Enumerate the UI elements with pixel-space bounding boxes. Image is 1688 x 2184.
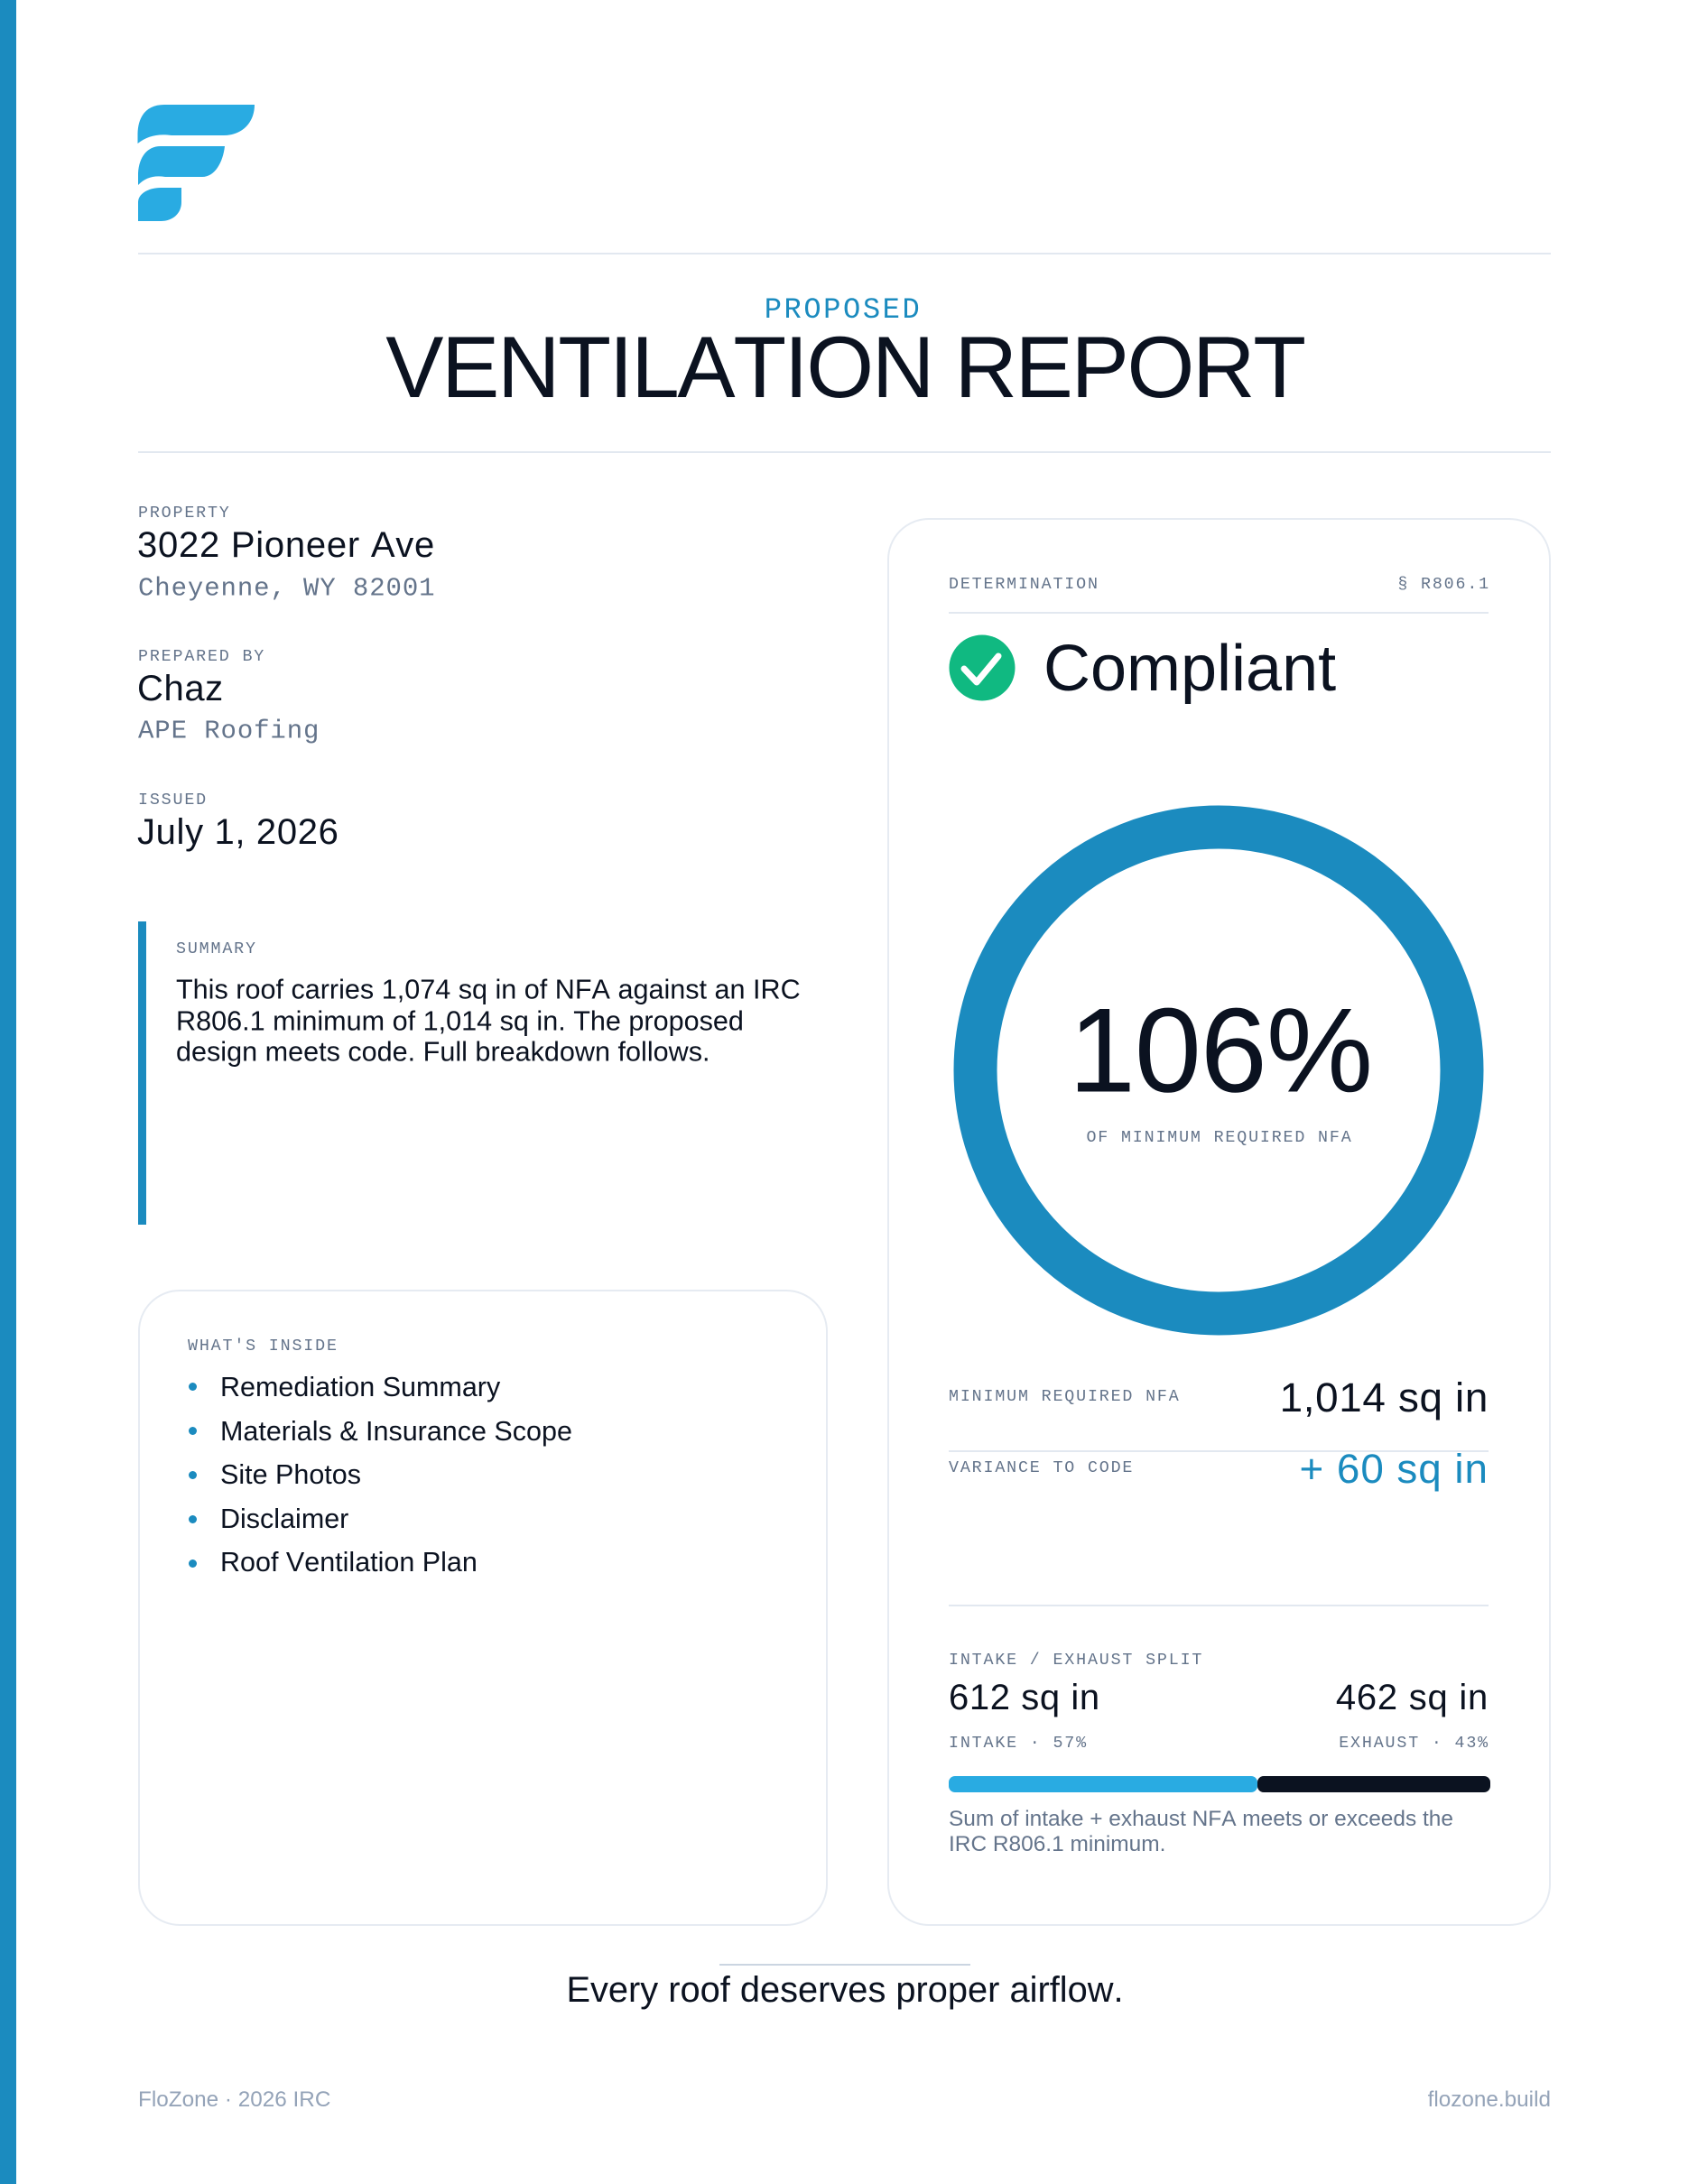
- summary: design meets code. Full breakdown follows.: [176, 1037, 710, 1068]
- summary: R806.1 minimum of 1,014 sq in. The proposed: [176, 1006, 744, 1037]
- status: Compliant: [1043, 633, 1336, 705]
- text: PROPERTY: [138, 504, 231, 523]
- summary: SUMMARY: [176, 939, 257, 958]
- text: APE Roofing: [138, 717, 320, 745]
- panel: determination: OF MINIMUM REQUIRED NFA: [1086, 1128, 1353, 1147]
- panel: determination: [887, 518, 1551, 1926]
- title block: PROPOSED: [765, 293, 922, 327]
- panel: determination: 612 sq in: [949, 1678, 1100, 1717]
- footer left: FloZone · 2026 IRC: [138, 2087, 330, 2112]
- panel: determination: DETERMINATION: [949, 575, 1099, 594]
- panel: determination: EXHAUST · 43%: [1339, 1734, 1489, 1753]
- note: Sum of intake + exhaust NFA meets or exceeds the: [949, 1807, 1453, 1831]
- panel: what's inside: WHAT'S INSIDE: [188, 1337, 339, 1356]
- panel: determination: + 60 sq in: [1299, 1446, 1489, 1492]
- panel: what's inside: Materials & Insurance Scope: [220, 1416, 572, 1447]
- property details: [137, 504, 435, 852]
- panel: what's inside: Site Photos: [220, 1459, 361, 1490]
- logo: [137, 105, 255, 221]
- left accent bar: [0, 0, 16, 2184]
- split bar: [949, 1776, 1257, 1792]
- text: July 1, 2026: [137, 812, 339, 852]
- tagline: Every roof deserves proper airflow.: [566, 1970, 1124, 2010]
- panel: determination: 1,014 sq in: [1280, 1374, 1489, 1421]
- minimum required: MINIMUM REQUIRED NFA: [949, 1387, 1181, 1406]
- panel: determination: IRC R806.1 minimum.: [949, 1832, 1165, 1856]
- panel: what's inside: Roof Ventilation Plan: [220, 1547, 478, 1578]
- panel: determination: 462 sq in: [1336, 1678, 1489, 1717]
- footer right: flozone.build: [1428, 2087, 1551, 2112]
- text: PREPARED BY: [138, 647, 265, 666]
- ring gauge: [953, 805, 1484, 1336]
- summary: [138, 921, 801, 1225]
- title block: VENTILATION REPORT: [385, 319, 1304, 416]
- panel: what's inside: [138, 1290, 828, 1926]
- summary: This roof carries 1,074 sq in of NFA against an IRC: [176, 975, 801, 1005]
- variance: VARIANCE TO CODE: [949, 1458, 1134, 1477]
- panel: what's inside: Disclaimer: [220, 1504, 348, 1534]
- gauge value: 106%: [1069, 984, 1372, 1117]
- panel: determination: INTAKE · 57%: [949, 1734, 1088, 1753]
- text: Cheyenne, WY 82001: [138, 574, 435, 603]
- text: Chaz: [137, 669, 224, 708]
- icon: check: [950, 635, 1015, 700]
- intake exhaust split: INTAKE / EXHAUST SPLIT: [949, 1651, 1203, 1670]
- text: ISSUED: [138, 791, 208, 810]
- text: 3022 Pioneer Ave: [137, 525, 435, 565]
- panel: what's inside: Remediation Summary: [220, 1372, 500, 1402]
- panel: determination: § R806.1: [1397, 575, 1490, 594]
